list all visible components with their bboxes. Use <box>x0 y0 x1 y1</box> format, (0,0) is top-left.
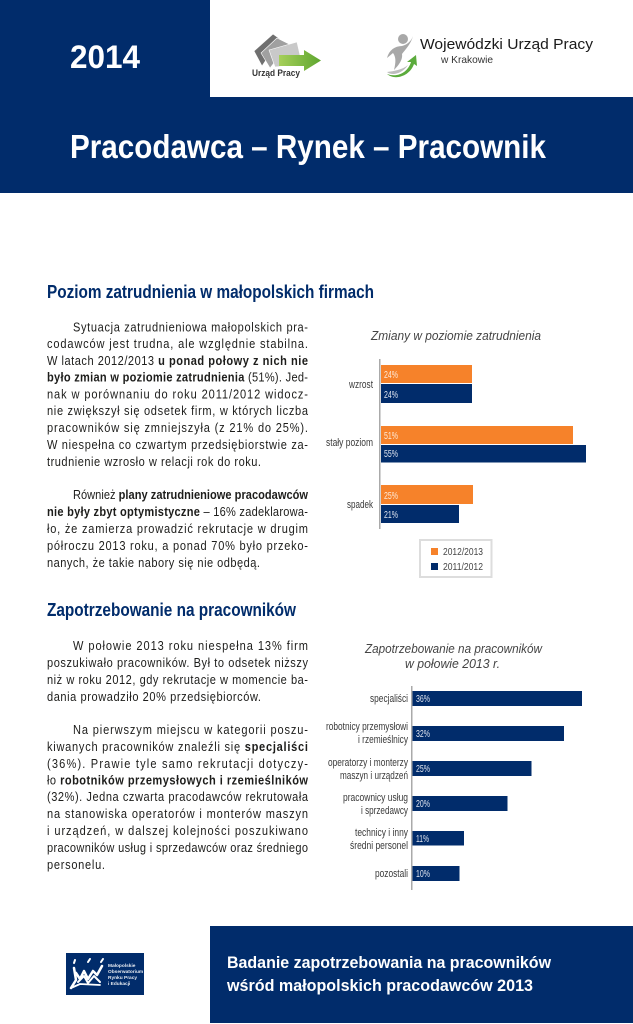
text block: demand for workers: kiwanych pracowników znaleźli się specjaliści <box>47 739 308 754</box>
category labels: stały poziom <box>326 437 373 449</box>
legend: 2011/2012 <box>443 561 483 573</box>
text block: demand for workers: niż w roku 2012, gdy rekrutacje w momencie ba- <box>47 672 308 687</box>
text block: employment level: nie zwiększył się odsetek firm, w których liczba <box>47 403 308 418</box>
bar values: 24% <box>384 370 398 381</box>
logo: Małopolskie Obserwatorium: Obserwatorium <box>108 969 143 975</box>
heading: Zapotrzebowanie: Zapotrzebowanie na pracowników <box>47 600 297 620</box>
logo: Małopolskie Obserwatorium: Małopolskie <box>108 963 136 969</box>
logo: Urząd Pracy: Urząd Pracy <box>252 68 300 78</box>
text block: demand for workers: i urządzeń, w dalszej kolejności poszukiwano <box>47 823 308 838</box>
footer text: wśród małopolskich pracodawców 2013 <box>226 976 533 995</box>
category labels: średni personel <box>350 840 408 852</box>
category labels: i sprzedawcy <box>361 805 408 817</box>
text block: demand for workers: pracowników usług i sprzedawców oraz średniego <box>47 840 308 855</box>
category labels: technicy i inny <box>355 827 408 839</box>
text block: employment level: ło, że zamierza prowadzić rekrutacje w drugim <box>47 521 308 536</box>
bar values: 20% <box>416 799 430 810</box>
logo: Urząd Pracy <box>252 34 321 78</box>
chart title: w połowie 2013 r. <box>405 657 500 671</box>
bar values <box>416 694 430 880</box>
bar values: 36% <box>416 694 430 705</box>
text block: employment level: W niespełna co czwartym przedsiębiorstwie za- <box>47 437 308 452</box>
category labels: wzrost <box>348 379 373 391</box>
bar values: 10% <box>416 869 430 880</box>
category labels: robotnicy przemysłowi <box>326 721 408 733</box>
logo: Wojewódzki Urząd Pracy <box>387 34 594 77</box>
bar values: 24% <box>384 390 398 401</box>
logo: Wojewódzki Urząd Pracy: Wojewódzki Urząd Pracy <box>420 36 594 53</box>
chart title <box>364 642 543 671</box>
text block: employment level: nie były zbyt optymistyczne – 16% zadeklarowa- <box>47 504 308 519</box>
text block: demand for workers: Na pierwszym miejscu w kategorii poszu- <box>73 722 308 737</box>
text block: employment level <box>47 320 309 570</box>
category labels: pracownicy usług <box>343 792 408 804</box>
year: 2014 <box>70 39 140 75</box>
chart title: Zmiany w poziomie zatrudnienia <box>370 329 541 343</box>
text block: demand for workers: ło robotników przemysłowych i rzemieślników <box>47 773 309 788</box>
text block: employment level: nak w porównaniu do roku 2011/2012 widocz- <box>47 387 308 402</box>
text block: demand for workers: (36%). Prawie tyle samo rekrutacji dotyczy- <box>47 756 308 771</box>
text block: demand for workers: personelu. <box>47 857 105 872</box>
chart: Zapotrzebowanie na pracowników <box>326 642 582 890</box>
category labels: specjaliści <box>370 693 408 705</box>
logo: Małopolskie Obserwatorium <box>66 953 144 995</box>
text block: employment level: nanych, że takie nabory się nie odbędą. <box>47 555 260 570</box>
category labels: spadek <box>347 499 373 511</box>
footer text: Badanie zapotrzebowania na pracowników <box>227 953 552 972</box>
bar values: 51% <box>384 431 398 442</box>
main title: Pracodawca – Rynek – Pracownik <box>70 128 547 165</box>
legend <box>420 540 492 577</box>
text block: employment level: Sytuacja zatrudnieniowa małopolskich pra- <box>73 320 308 335</box>
text block: demand for workers: dania prowadziło 20% przedsiębiorców. <box>47 689 261 704</box>
text block: employment level: Również plany zatrudnieniowe pracodawców <box>73 487 309 502</box>
axis <box>411 686 412 890</box>
text block: demand for workers <box>47 638 309 872</box>
category labels <box>326 379 373 511</box>
heading: Poziom zatrudnienia: Poziom zatrudnienia w małopolskich firmach <box>47 282 374 302</box>
bar values <box>384 370 398 521</box>
chart title: Zapotrzebowanie na pracowników <box>364 642 543 656</box>
category labels: pozostali <box>375 868 408 880</box>
logo: Małopolskie Obserwatorium: Rynku Pracy <box>108 975 137 981</box>
text block: demand for workers: (32%). Jedna czwarta pracodawców rekrutowała <box>47 789 308 804</box>
text block: employment level: było zmian w poziomie zatrudnienia (51%). Jed- <box>47 370 308 385</box>
logo: Małopolskie Obserwatorium: i Edukacji <box>108 981 130 987</box>
text block: demand for workers: na stanowiska operatorów i monterów maszyn <box>47 806 308 821</box>
header band <box>0 0 633 193</box>
category labels: maszyn i urządzeń <box>340 770 408 782</box>
bar values: 25% <box>416 764 430 775</box>
category labels: i rzemieślnicy <box>358 734 408 746</box>
text block: employment level: codawców jest trudna, ale względnie stabilna. <box>47 336 308 351</box>
text block: demand for workers: poszukiwało pracowników. Był to odsetek niższy <box>47 655 308 670</box>
text block: employment level: półroczu 2013 roku, a ponad 70% było przeko- <box>47 538 308 553</box>
bar values: 32% <box>416 729 430 740</box>
axis <box>379 359 380 529</box>
bar values: 25% <box>384 491 398 502</box>
bar values: 11% <box>416 834 429 845</box>
bar values: 55% <box>384 449 398 460</box>
category labels <box>326 693 408 880</box>
chart: Zmiany w poziomie zatrudnienia <box>326 329 586 577</box>
bars <box>381 365 586 523</box>
footer panel <box>210 926 633 1023</box>
logo: Wojewódzki Urząd Pracy: w Krakowie <box>440 54 493 66</box>
legend: 2012/2013 <box>443 546 483 558</box>
text block: employment level: W latach 2012/2013 u ponad połowy z nich nie <box>47 353 308 368</box>
category labels: operatorzy i monterzy <box>328 757 408 769</box>
text block: employment level: trudnienie wzrosło w relacji rok do roku. <box>47 454 261 469</box>
text block: demand for workers: W połowie 2013 roku niespełna 13% firm <box>73 638 308 653</box>
text block: employment level: pracowników się zmniejszyła (z 21% do 25%). <box>47 420 308 435</box>
bar values: 21% <box>384 510 398 521</box>
bars <box>412 691 582 881</box>
footer text <box>226 953 552 995</box>
